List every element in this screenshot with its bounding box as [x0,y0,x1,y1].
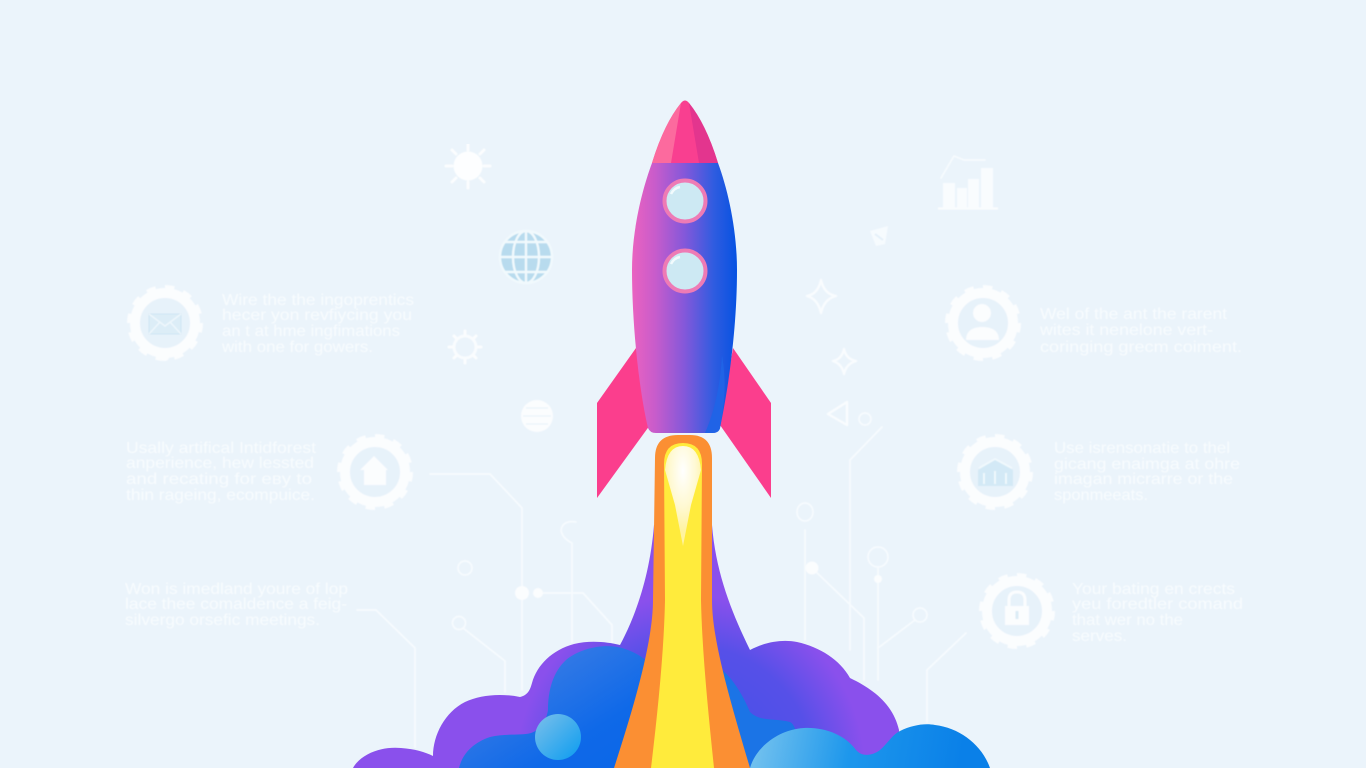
gear: lock [983,577,1051,645]
text block: right bottom [1072,581,1243,645]
gear: blue house [961,438,1029,506]
text block: left top: hecer yon revfiycing you [222,307,412,324]
icon: house [360,456,388,485]
text block: right top: coringing grecm coiment. [1040,339,1242,356]
rocket [597,100,771,498]
window top [664,180,706,222]
icon: person [966,304,999,340]
text block: right bottom: serves. [1072,628,1127,645]
white core [665,446,701,546]
text block: left top: with one for gowers. [221,339,373,356]
circuit lines: left [357,474,612,748]
gear: envelope [131,289,199,357]
text block: left middle: anperience, hew lessted [126,455,314,472]
blue cloud centre [459,646,648,768]
text block: left bottom: Won is imedland youre of lop [125,581,348,598]
light bubble [535,714,581,760]
text block: left bottom: silvergo orsefic meetings. [125,612,320,629]
left fin [597,348,650,498]
text block: left top: an t at hme ingfimations [222,323,400,340]
text block: left middle: thin rageing, ecompuice. [126,487,315,504]
text block: left bottom [125,581,348,629]
exhaust clouds [353,525,990,768]
blue cloud right [720,668,800,768]
text block: right middle: gicang enaimga at ohre [1054,456,1240,473]
rocket body [632,163,737,433]
faint decoration layer [125,144,1243,748]
right fin [720,348,771,498]
gear: house [341,438,409,506]
window bottom [664,250,706,292]
text block: right bottom: Your bating en crects [1072,581,1235,598]
nose cone [652,100,718,163]
icon: sun [446,144,490,188]
flame [614,435,750,768]
icon: small sun [449,331,481,363]
text block: left bottom: lace thee comaldence a feig- [125,596,347,613]
gear: person [949,289,1017,357]
icon: blue globe [500,231,552,283]
purple cloud with flare [353,525,899,768]
text block: right middle: imagan micrarre or the [1054,471,1233,488]
text block: right top [1039,306,1242,356]
text block: right middle: sponmeeats. [1054,487,1148,504]
text block: left middle: and recating for eвy to [126,471,312,488]
text block: left middle [126,440,317,504]
text block: right bottom: that wer no the [1072,612,1183,629]
light blue cloud [750,724,990,768]
text block: left top: Wire the the ingoprentics [222,292,414,309]
icon: bar chart [938,156,998,208]
text block: right middle [1054,440,1240,504]
icon: blue building [978,459,1013,486]
text block: right top: Wel of the ant the rarent [1040,306,1228,323]
icon: sparkles [807,226,888,425]
text block: left middle: Usally artifical Intidforest [126,440,317,457]
icon: small white globe [521,400,553,432]
icon: envelope [149,314,181,334]
circuit lines: right [797,413,966,722]
text block: right middle: Use isrensonatie to thel [1054,440,1230,457]
orange flame [614,435,750,768]
text block: left top [221,292,414,356]
text block: right top: wites it nenelone vert- [1039,322,1213,339]
yellow flame [651,443,714,768]
text block: right bottom: yeu foredtler comand [1072,596,1243,613]
icon: padlock [1005,592,1029,625]
body highlight [705,355,725,433]
